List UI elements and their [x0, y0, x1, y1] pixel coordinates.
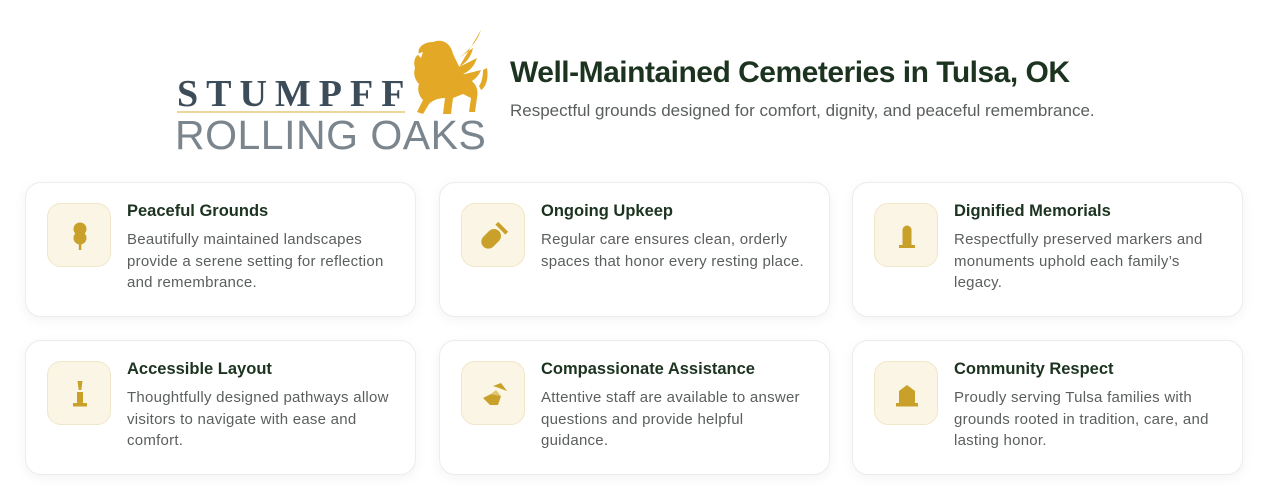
panel: Community Respect: Community Respect [954, 360, 1114, 378]
icon: hands [461, 361, 525, 425]
logo [175, 30, 488, 158]
panel: Compassionate Assistance: questions and provide helpful [541, 410, 743, 428]
panel: Accessible Layout: visitors to navigate with ease and [127, 410, 356, 428]
panel: Community Respect [852, 340, 1243, 475]
panel: Ongoing Upkeep [439, 182, 830, 317]
panel: Peaceful Grounds: Beautifully maintained landscapes [127, 231, 362, 248]
panel: Accessible Layout: Thoughtfully designed pathways allow [127, 389, 389, 406]
panel: Community Respect: grounds rooted in tradition, care, and [954, 410, 1209, 428]
panel: Peaceful Grounds: and remembrance. [127, 274, 257, 291]
subtitle: Respectful grounds designed for comfort, dignity, and peaceful remembrance. [510, 101, 1095, 120]
icon: marker [461, 203, 525, 267]
panel: Peaceful Grounds: Peaceful Grounds [127, 202, 268, 220]
panel: Dignified Memorials [852, 182, 1243, 317]
panel: Peaceful Grounds [25, 182, 416, 317]
icon: post [47, 361, 111, 425]
panel: Community Respect: Proudly serving Tulsa families with [954, 389, 1192, 406]
logo: STUMPFF wordmark: STUMPFF [177, 73, 412, 115]
panel: Dignified Memorials: legacy. [954, 274, 1002, 291]
panel: Dignified Memorials: Dignified Memorials [954, 202, 1111, 220]
logo: ROLLING OAKS: ROLLING OAKS [175, 112, 486, 158]
icon: headstone [874, 203, 938, 267]
logo: lion emblem [414, 30, 488, 114]
panel: Peaceful Grounds: provide a serene setting for reflection [127, 252, 384, 270]
panel: Dignified Memorials: Respectfully preserved markers and [954, 231, 1203, 248]
panel: Compassionate Assistance: Compassionate Assistance [541, 360, 755, 378]
icon: monument [874, 361, 938, 425]
panel: Accessible Layout [25, 340, 416, 475]
panel: Compassionate Assistance: Attentive staff are available to answer [541, 389, 800, 406]
panel: Community Respect: lasting honor. [954, 432, 1047, 449]
panel: Compassionate Assistance [439, 340, 830, 475]
panel: Ongoing Upkeep: spaces that honor every resting place. [541, 252, 804, 270]
panel: Dignified Memorials: monuments uphold each family’s [954, 252, 1180, 270]
panel: Ongoing Upkeep: Regular care ensures clean, orderly [541, 231, 787, 248]
panel: Accessible Layout: Accessible Layout [127, 360, 272, 378]
title: Well-Maintained Cemeteries in Tulsa, OK [510, 56, 1070, 89]
panel: Accessible Layout: comfort. [127, 432, 183, 449]
icon: tree [47, 203, 111, 267]
panel: Ongoing Upkeep: Ongoing Upkeep [541, 202, 673, 220]
panel: Compassionate Assistance: guidance. [541, 432, 608, 449]
